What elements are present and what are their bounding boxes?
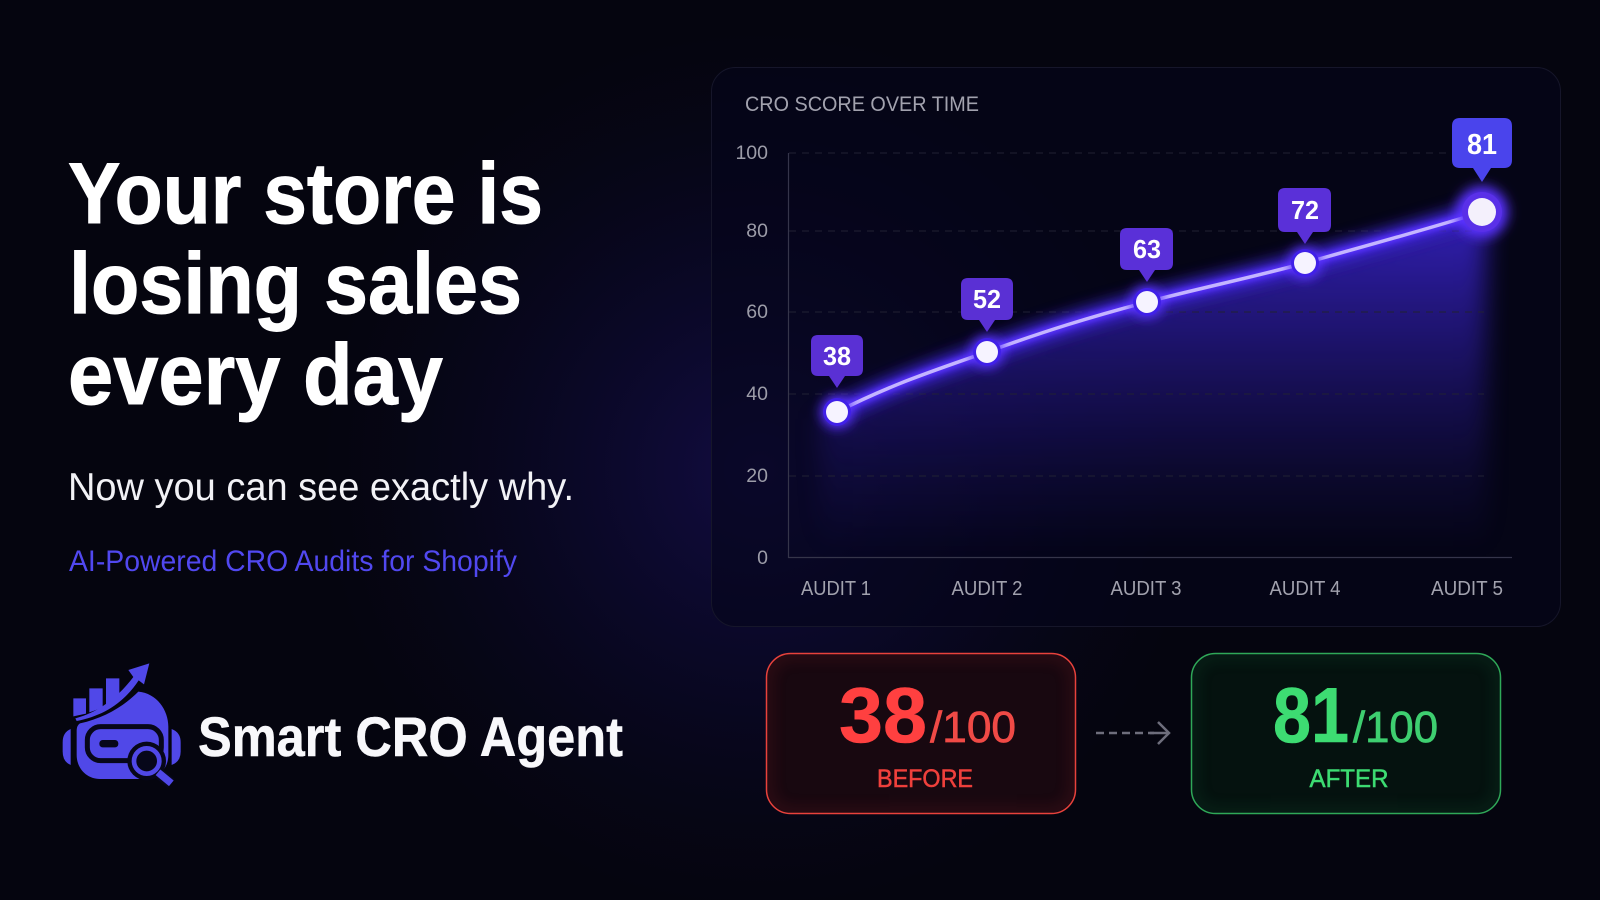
arrow: before to after <box>1096 722 1169 744</box>
x axis labels: AUDIT 4 <box>1270 578 1340 600</box>
panel: CRO score chart <box>712 68 1560 626</box>
headline: every day <box>68 327 443 423</box>
grid lines and axes <box>788 153 1512 558</box>
before denominator: /100 <box>930 703 1016 752</box>
panel background <box>712 68 1560 626</box>
headline: losing sales <box>69 236 522 332</box>
x axis labels: AUDIT 2 <box>952 578 1022 600</box>
data points <box>821 186 1508 428</box>
x axis labels: AUDIT 5 <box>1431 578 1503 600</box>
headline: Your store is <box>68 146 543 242</box>
y axis labels: 100 <box>735 142 768 164</box>
callout: 63: 63 <box>1133 234 1161 264</box>
callout: 52 <box>961 278 1013 332</box>
subheading: Now you can see exactly why. <box>68 466 574 509</box>
before score: 38 <box>839 671 927 759</box>
x axis labels <box>801 578 1503 600</box>
x axis labels: AUDIT 1 <box>801 578 871 600</box>
score line <box>837 212 1482 412</box>
callout: 72: 72 <box>1291 195 1319 225</box>
y axis labels: 0 <box>757 547 768 569</box>
y axis labels: 20 <box>746 465 768 487</box>
logo icon: robot head with chart and magnifier <box>63 663 181 783</box>
y axis labels <box>735 142 768 569</box>
after denominator: /100 <box>1353 703 1438 752</box>
headline <box>68 146 543 423</box>
callout: 81: 81 <box>1467 129 1497 161</box>
area under line <box>820 212 1486 557</box>
callout: 81 <box>1452 118 1512 182</box>
y axis labels: 40 <box>746 383 768 405</box>
after card <box>1192 654 1500 814</box>
callout: 63 <box>1120 228 1173 282</box>
callout: 38: 38 <box>823 341 851 371</box>
y axis labels: 60 <box>746 301 768 323</box>
callout: 38 <box>811 335 863 388</box>
y axis labels: 80 <box>746 220 768 242</box>
before card <box>766 654 1076 814</box>
chart title: CRO SCORE OVER TIME <box>745 93 979 116</box>
callout: 52: 52 <box>973 284 1001 314</box>
callout: 72 <box>1278 188 1331 244</box>
x axis labels: AUDIT 3 <box>1110 578 1182 600</box>
logo wordmark: Smart CRO Agent <box>198 705 623 768</box>
before label: BEFORE <box>877 765 973 793</box>
after label: AFTER <box>1310 765 1388 793</box>
after score: 81 <box>1273 671 1349 759</box>
tagline: AI-Powered CRO Audits for Shopify <box>69 545 517 578</box>
infographic canvas <box>62 67 1561 814</box>
